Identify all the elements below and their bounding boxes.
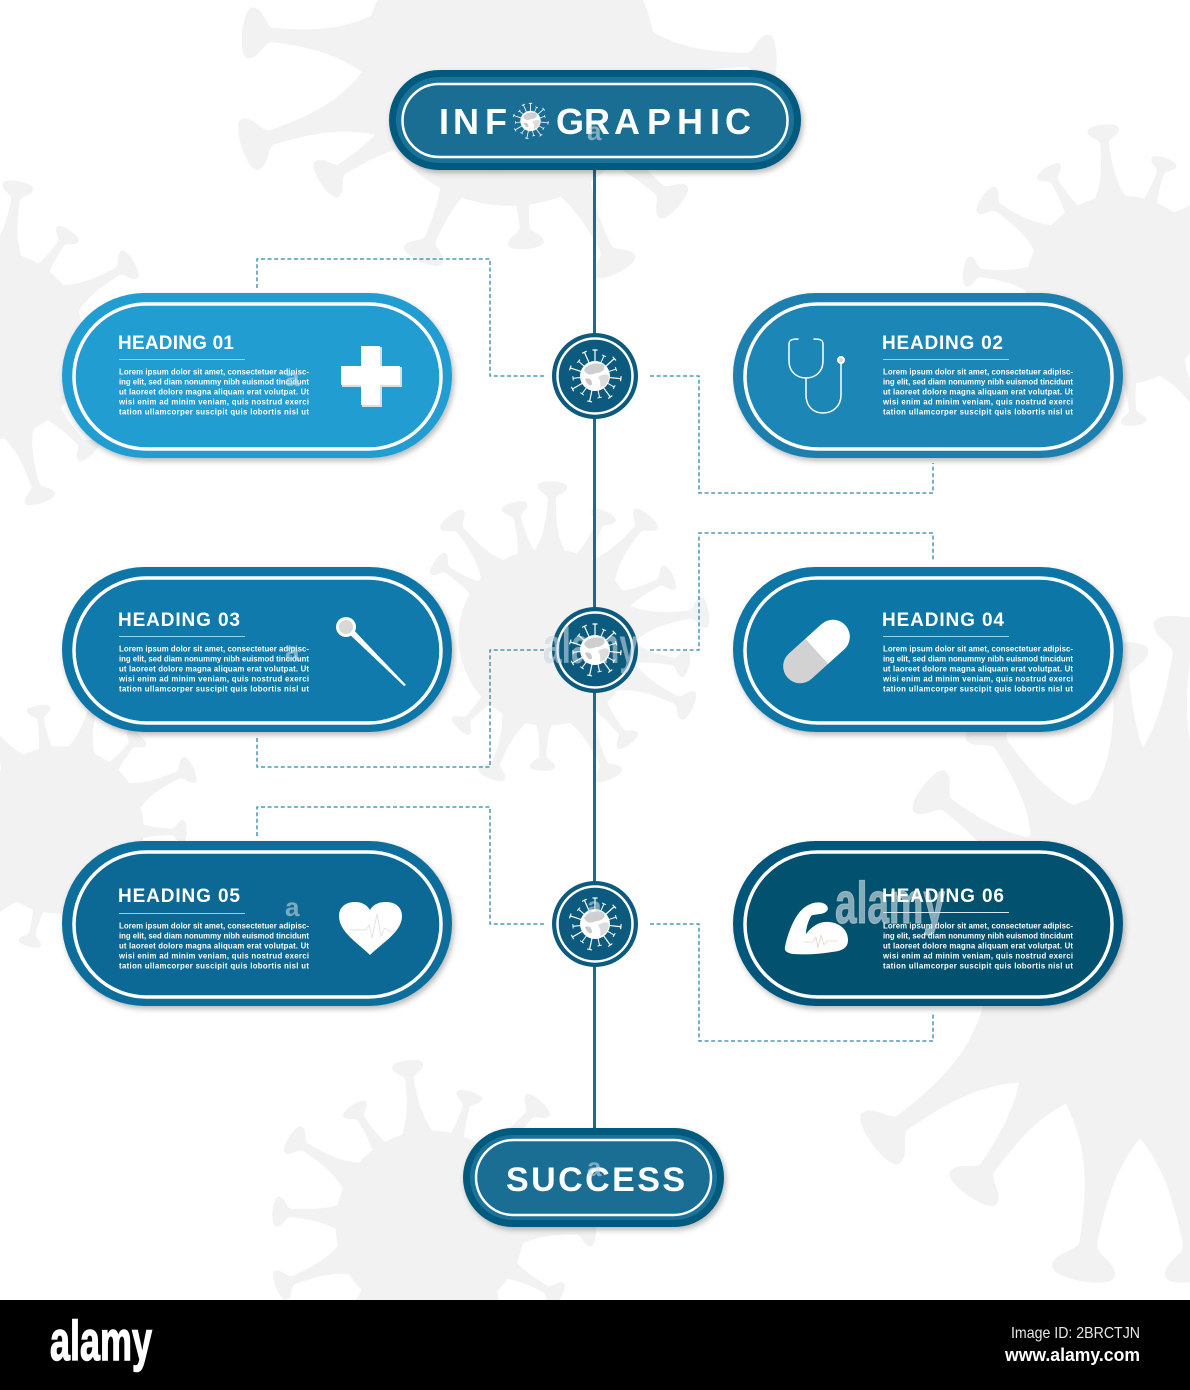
icon: title virus	[513, 103, 548, 139]
title pill	[389, 70, 801, 170]
panel: heading 04: HEADING 04	[882, 610, 1004, 631]
small watermarks	[285, 116, 602, 1182]
success pill	[463, 1128, 724, 1227]
panel: heading 06: HEADING 06	[882, 886, 1004, 907]
dashed connectors	[257, 259, 933, 1041]
icon: flexed arm	[785, 902, 848, 954]
small watermarks: a	[285, 892, 300, 922]
virus node 2	[543, 607, 638, 693]
small watermarks: a	[285, 362, 300, 392]
title text: O	[521, 108, 540, 135]
watermark: alamy	[543, 618, 638, 674]
footer bar: alamy	[50, 1309, 152, 1372]
icon: medical cross	[341, 346, 402, 407]
icon: stethoscope	[789, 339, 844, 413]
panel: heading 05: HEADING 05	[118, 886, 240, 907]
panel: heading 03: HEADING 03	[118, 610, 240, 631]
panel: heading 04	[733, 567, 1123, 732]
icon: heart	[339, 902, 402, 955]
icon: swab	[336, 617, 406, 686]
panel: heading 06	[733, 841, 1123, 1006]
panel: heading 03	[62, 567, 452, 732]
small watermarks: a	[587, 1152, 602, 1182]
title text: GRAPHIC	[556, 101, 751, 142]
virus node 3	[552, 881, 638, 967]
small watermarks: a	[587, 891, 602, 921]
panel: heading 05	[62, 841, 452, 1006]
small watermarks: a	[587, 116, 602, 146]
virus node 1	[552, 333, 638, 419]
panel: heading 01: HEADING 01	[118, 333, 234, 354]
footer bar	[0, 1300, 1190, 1390]
small watermarks: a	[285, 636, 300, 666]
panel: heading 02	[733, 293, 1123, 458]
panel: heading 01	[62, 293, 452, 458]
footer bar: www.alamy.com	[1004, 1345, 1140, 1365]
success text: SUCCESS	[506, 1161, 685, 1199]
title text: INF	[439, 101, 507, 142]
panel: heading 02: HEADING 02	[882, 333, 1003, 354]
watermark: alamy	[835, 871, 945, 936]
icon: pill	[776, 613, 857, 690]
footer bar: Image ID: 2BRCTJN	[1011, 1325, 1140, 1342]
central vertical line	[593, 168, 596, 1130]
